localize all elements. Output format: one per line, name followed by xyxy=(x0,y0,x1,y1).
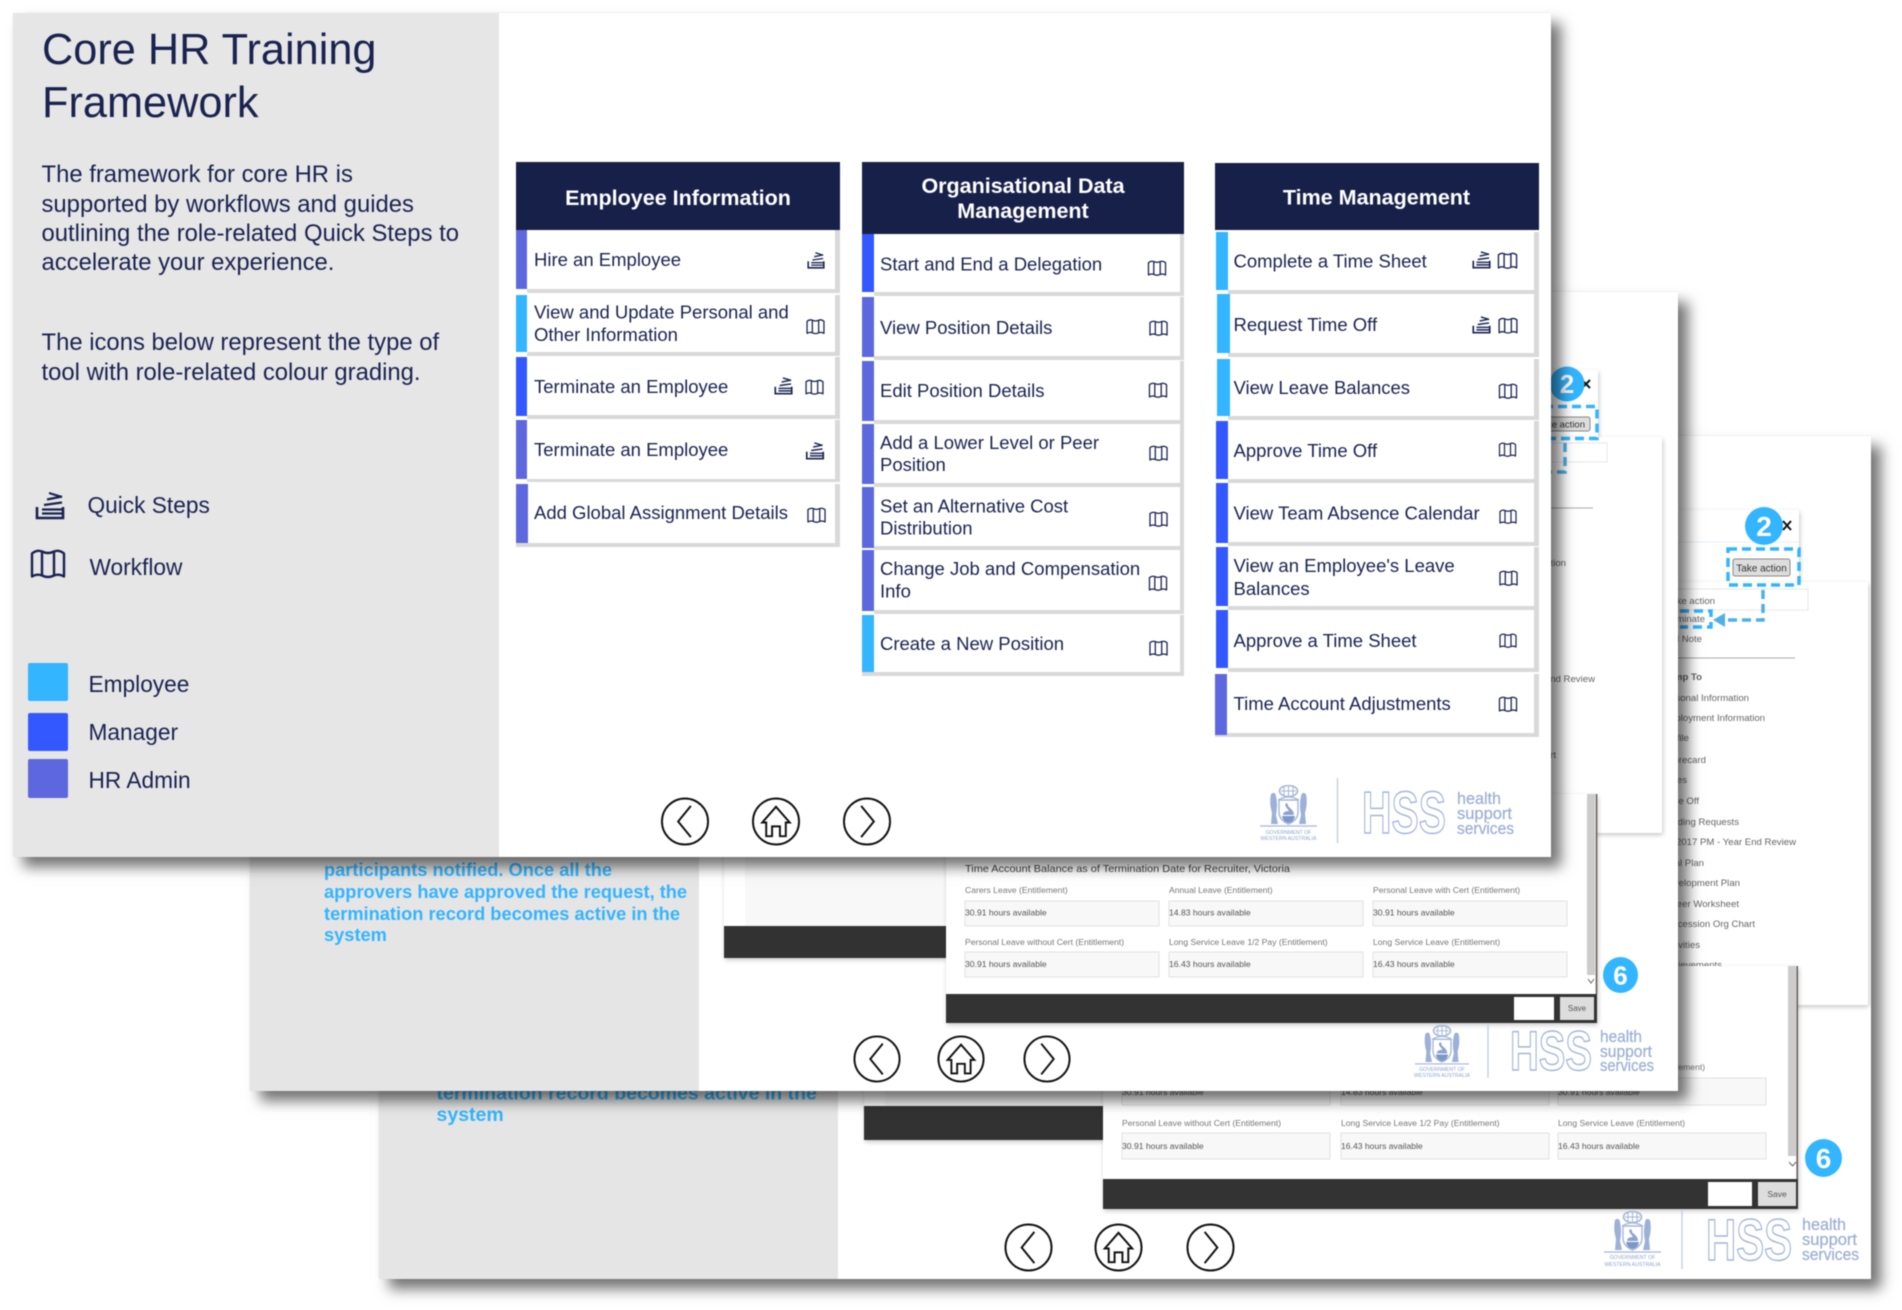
text: blue note slide 3 xyxy=(436,1082,817,1126)
panel: take action menu slide 3: Personal Information xyxy=(1660,693,1749,704)
header: Time Management: Time Management xyxy=(1283,186,1470,210)
row: Hire an Employee xyxy=(516,230,840,293)
button: take action slide 2 xyxy=(1530,417,1590,431)
panel: time account form slide 2 xyxy=(946,794,1597,1023)
column: Organisational Data Management xyxy=(862,162,1184,676)
panel: time account form slide 3: 14.83 hours available xyxy=(1341,1087,1423,1097)
panel: time account form slide 3: 30.91 hours available xyxy=(1122,1141,1204,1151)
header: Organisational Data Management: Management xyxy=(957,199,1089,223)
row: View Position Details xyxy=(862,297,1184,360)
panel: older form behind slide 2 xyxy=(724,800,946,958)
row: Terminate an Employee HR admin xyxy=(516,420,840,482)
row: View Leave Balances xyxy=(1217,359,1539,420)
callout: dashed highlight slide 2 xyxy=(1530,406,1597,472)
legend: role colours: Employee xyxy=(88,671,189,697)
icon: previous xyxy=(662,798,708,845)
text: icon explanation: tool with role-related colour grading. xyxy=(42,359,421,386)
logo: slide 2 government and HSS: WESTERN AUSTRALIA xyxy=(1414,1073,1470,1079)
panel: take action menu slide 3: Achievements xyxy=(1662,960,1722,971)
panel: time account form slide 3: 16.43 hours available xyxy=(1558,1141,1640,1151)
row: Time Account Adjustments: Time Account Adjustments xyxy=(1234,693,1451,714)
icon: next xyxy=(844,798,890,845)
icon: workflow xyxy=(32,551,64,577)
logo: slide 3 government and HSS: HSS xyxy=(1706,1208,1792,1273)
row: Edit Position Details xyxy=(862,361,1184,424)
logo: main slide government and HSS: health xyxy=(1457,789,1501,808)
row: View Team Absence Calendar xyxy=(1216,483,1539,546)
column: Employee Information xyxy=(516,162,840,547)
row: Add a Lower Level or Peer Position: Add a Lower Level or Peer xyxy=(880,432,1099,453)
logo: slide 3 government and HSS: services xyxy=(1802,1245,1859,1264)
callout: step 6 badge slide 3: 6 xyxy=(1816,1143,1831,1174)
logo: main slide government and HSS: WESTERN AUSTRALIA xyxy=(1261,836,1317,842)
row: Add a Lower Level or Peer Position xyxy=(862,424,1184,487)
logo: slide 2 government and HSS: services xyxy=(1600,1056,1654,1075)
row: Start and End a Delegation: Start and End a Delegation xyxy=(880,254,1102,274)
callout: step 2 badge slide 3: 2 xyxy=(1756,511,1772,542)
header: Employee Information xyxy=(516,162,840,230)
logo: slide 2 government and HSS: GOVERNMENT OF xyxy=(1419,1067,1465,1073)
text: blue note slide 2: termination record becomes active in the xyxy=(324,903,680,924)
row: Approve Time Off: Approve Time Off xyxy=(1234,440,1378,461)
row: Approve a Time Sheet: Approve a Time Sheet xyxy=(1234,630,1417,651)
legend: tool types: Quick Steps xyxy=(88,492,210,518)
text: icon explanation xyxy=(42,329,440,386)
legend: tool types: Workflow xyxy=(90,554,183,580)
icon: close slide 3 xyxy=(1783,521,1791,530)
callout: step 6 badge slide 2 xyxy=(1603,957,1638,993)
row: Add Global Assignment Details xyxy=(516,484,840,547)
panel: time account form slide 2: 30.91 hours available xyxy=(965,959,1047,969)
row: Change Job and Compensation Info: Info xyxy=(880,580,911,602)
row: Terminate an Employee manager: Terminate an Employee xyxy=(534,376,728,397)
panel: time account form slide 2: Carers Leave (Entitlement) xyxy=(965,885,1068,895)
button: take action slide 3: Take action xyxy=(1736,564,1787,574)
text: framework description xyxy=(42,161,459,276)
row: View and Update Personal and Other Information: Other Information xyxy=(534,324,678,345)
title xyxy=(42,26,376,127)
navigation: slide 2 buttons xyxy=(854,1036,1070,1082)
panel: take action menu slide 3 xyxy=(1600,582,1868,1005)
row: Change Job and Compensation Info: Change Job and Compensation xyxy=(880,558,1140,579)
panel: take action menu slide 2 xyxy=(1462,437,1662,833)
row: Start and End a Delegation xyxy=(862,234,1184,296)
panel: take action top pane slide 2 xyxy=(1500,370,1598,438)
row: Approve a Time Sheet xyxy=(1216,610,1539,672)
panel: time account form slide 2: Long Service Leave 1/2 Pay (Entitlement) xyxy=(1169,937,1328,947)
panel: time account form slide 3: Long Service Leave (Entitlement) xyxy=(1558,1118,1685,1128)
callout: step 2 badge slide 3 xyxy=(1745,507,1783,545)
row: Hire an Employee: Hire an Employee xyxy=(534,249,681,270)
title: Core HR Training xyxy=(42,26,376,74)
panel: time account form slide 2: Save xyxy=(1568,1004,1587,1013)
row: Complete a Time Sheet: Complete a Time Sheet xyxy=(1234,250,1427,272)
row: View Position Details: View Position Details xyxy=(880,317,1052,338)
title: Framework xyxy=(42,79,259,127)
icon: quick steps xyxy=(37,493,63,518)
logo: main slide government and HSS: HSS xyxy=(1362,780,1446,846)
row: View and Update Personal and Other Information xyxy=(516,295,840,356)
panel: take action menu slide 3: Pending Requests xyxy=(1661,817,1739,828)
legend: role colours: Manager xyxy=(88,719,178,745)
row: View Team Absence Calendar: View Team Absence Calendar xyxy=(1234,502,1480,524)
text: blue note slide 2: approvers have approved the request, the xyxy=(324,881,687,902)
row: Approve Time Off xyxy=(1216,421,1539,483)
panel: take action menu slide 3: Jump To xyxy=(1663,672,1702,683)
column: Time Management xyxy=(1215,163,1539,737)
text: blue note slide 2: participants notified. Once all the xyxy=(324,859,612,880)
panel: take action menu slide 2: Employment Information xyxy=(1462,558,1566,569)
row: Add Global Assignment Details: Add Global Assignment Details xyxy=(534,502,788,523)
row: Set an Alternative Cost Distribution: Distribution xyxy=(880,518,973,538)
logo: main slide government and HSS: services xyxy=(1457,819,1514,838)
callout: step 2 badge slide 2: 2 xyxy=(1560,369,1574,399)
row: View an Employee's Leave Balances: Balances xyxy=(1234,578,1310,599)
row: Set an Alternative Cost Distribution: Set an Alternative Cost xyxy=(880,496,1068,516)
legend: role colours: HR Admin xyxy=(88,767,191,793)
legend: role colours xyxy=(28,663,191,798)
row: View Leave Balances: View Leave Balances xyxy=(1234,377,1410,398)
navigation: main slide buttons xyxy=(662,798,890,845)
logo: slide 2 government and HSS: support xyxy=(1600,1042,1652,1061)
row: Create a New Position xyxy=(862,615,1184,676)
panel: time account form slide 2: Long Service Leave (Entitlement) xyxy=(1373,937,1500,947)
panel: take action menu slide 2: Succession Org Chart xyxy=(1462,750,1556,761)
panel: time account form slide 3: Personal Leave without Cert (Entitlement) xyxy=(1122,1118,1281,1128)
panel: time account form slide 2: 14.83 hours available xyxy=(1169,908,1251,918)
panel: take action menu slide 3: Employment Information xyxy=(1661,713,1765,724)
panel: time account form slide 3: Save xyxy=(1767,1189,1787,1199)
row: Request Time Off: Request Time Off xyxy=(1234,314,1378,335)
header: Time Management xyxy=(1215,163,1539,230)
button: take action slide 2: Take action xyxy=(1537,420,1585,430)
text: framework description: accelerate your experience. xyxy=(42,249,334,276)
panel: take action menu slide 3: Notes xyxy=(1662,775,1687,786)
logo: main slide government and HSS: support xyxy=(1457,804,1512,823)
panel: take action menu slide 3: Add Note xyxy=(1662,634,1702,645)
panel: take action menu slide 3: Career Worksheet xyxy=(1661,899,1739,910)
panel: time account form slide 2: Time Account Balance as of Termination Date for Recruiter, Victoria xyxy=(965,863,1290,875)
panel: time account form slide 2: Personal Leave with Cert (Entitlement) xyxy=(1373,885,1520,895)
callout: step 6 badge slide 3 xyxy=(1805,1139,1842,1177)
row: View and Update Personal and Other Information: View and Update Personal and xyxy=(534,302,789,322)
row: Edit Position Details: Edit Position Details xyxy=(880,380,1045,401)
panel: take action menu slide 3: 2017 PM - Year End Review xyxy=(1676,837,1796,848)
panel: time account form slide 2: 16.43 hours available xyxy=(1169,959,1251,969)
panel: time account form slide 3: 16.43 hours available xyxy=(1341,1141,1423,1151)
text: framework description: The framework for core HR is xyxy=(42,161,353,188)
row: Create a New Position: Create a New Position xyxy=(880,633,1064,654)
row: View an Employee's Leave Balances: View an Employee's Leave xyxy=(1234,555,1455,576)
panel: take action menu slide 3: Take action xyxy=(1666,596,1715,607)
callout: step 2 badge slide 2 xyxy=(1550,366,1584,402)
button: take action slide 3 xyxy=(1733,559,1790,576)
panel: take action menu slide 3: Profile xyxy=(1662,733,1689,744)
panel: take action menu slide 3: Development Plan xyxy=(1662,878,1740,889)
header: Employee Information: Employee Information xyxy=(565,186,791,210)
row: Time Account Adjustments xyxy=(1215,674,1539,737)
row: Terminate an Employee HR admin: Terminate an Employee xyxy=(534,439,728,460)
logo: slide 3 government and HSS: support xyxy=(1802,1230,1857,1249)
panel: time account form slide 3: 30.91 hours available xyxy=(1122,1087,1204,1097)
logo: slide 3 government and HSS: GOVERNMENT OF xyxy=(1610,1255,1655,1261)
panel: grey side panel slide 3 xyxy=(379,436,838,1279)
text: blue note slide 3: termination record becomes active in the xyxy=(436,1082,817,1104)
panel: main slide Core HR Training Framework xyxy=(13,13,1551,857)
row: Add a Lower Level or Peer Position: Position xyxy=(880,454,946,475)
row: Terminate an Employee manager xyxy=(516,357,840,419)
row: View an Employee's Leave Balances xyxy=(1216,547,1539,610)
logo: slide 2 government and HSS: HSS xyxy=(1510,1019,1592,1082)
panel: grey side panel slide 2 xyxy=(250,292,699,1091)
text: framework description: supported by workflows and guides xyxy=(42,191,414,218)
callout: dashed highlight and arrow slide 3 xyxy=(1680,549,1799,627)
panel: time account form slide 2: Personal Leave without Cert (Entitlement) xyxy=(965,937,1124,947)
navigation: slide 3 buttons xyxy=(1005,1224,1234,1271)
panel: take action menu slide 3: Time Off xyxy=(1663,796,1699,807)
panel: take action menu slide 3: Terminate xyxy=(1663,614,1705,625)
panel: background slide 3 xyxy=(379,436,1871,1279)
logo: slide 2 government and HSS xyxy=(1414,1019,1654,1082)
panel: take action menu slide 2: 2017 PM - Year End Review xyxy=(1475,674,1595,685)
logo: main slide government and HSS xyxy=(1260,778,1514,846)
panel: time account form slide 3 xyxy=(1103,966,1798,1209)
text: blue note slide 2: system xyxy=(324,924,387,945)
icon: close slide 2 xyxy=(1582,380,1590,388)
panel: time account form slide 2: 30.91 hours available xyxy=(1373,908,1455,918)
logo: slide 3 government and HSS: WESTERN AUSTRALIA xyxy=(1605,1262,1661,1268)
logo: main slide government and HSS: GOVERNMENT OF xyxy=(1266,830,1311,836)
panel: left grey sidebar xyxy=(13,13,499,857)
panel: take action menu slide 3: Activities xyxy=(1662,940,1700,951)
logo: slide 3 government and HSS: health xyxy=(1802,1215,1846,1234)
panel: background slide 2 xyxy=(250,292,1678,1091)
row: Request Time Off xyxy=(1217,294,1539,357)
panel: take action menu slide 3: Goal Plan xyxy=(1662,858,1704,869)
callout: step 6 badge slide 2: 6 xyxy=(1613,960,1628,990)
row: Set an Alternative Cost Distribution xyxy=(862,487,1184,550)
panel: time account form slide 3: Long Service Leave 1/2 Pay (Entitlement) xyxy=(1341,1118,1500,1128)
panel: take action menu slide 3: Succession Org Chart xyxy=(1661,919,1755,930)
logo: slide 2 government and HSS: health xyxy=(1600,1027,1642,1046)
header: Organisational Data Management: Organisational Data xyxy=(921,174,1126,198)
panel: take action top pane slide 3 xyxy=(1600,510,1799,584)
logo: slide 3 government and HSS xyxy=(1604,1208,1859,1273)
panel: take action menu slide 3: Scorecard xyxy=(1662,755,1706,766)
panel: older form behind slide 3 xyxy=(864,940,1104,1140)
icon: WA crest xyxy=(1260,786,1317,826)
panel: time account form slide 3: Personal Leave with Cert (Entitlement) xyxy=(1558,1062,1705,1072)
icon: home xyxy=(753,798,799,845)
text: icon explanation: The icons below represent the type of xyxy=(42,329,440,356)
text: framework description: outlining the role-related Quick Steps to xyxy=(42,220,459,247)
row: Complete a Time Sheet xyxy=(1216,232,1539,294)
text: blue note slide 2 xyxy=(324,859,687,945)
text: blue note slide 3: system xyxy=(436,1104,504,1126)
header: Organisational Data Management xyxy=(862,162,1184,234)
panel: time account form slide 2: Annual Leave (Entitlement) xyxy=(1169,885,1273,895)
panel: time account form slide 2: 30.91 hours available xyxy=(965,908,1047,918)
row: Change Job and Compensation Info xyxy=(862,550,1184,614)
panel: time account form slide 3: 30.91 hours available xyxy=(1558,1087,1640,1097)
panel: time account form slide 2: 16.43 hours available xyxy=(1373,959,1455,969)
legend: tool types xyxy=(32,492,210,580)
